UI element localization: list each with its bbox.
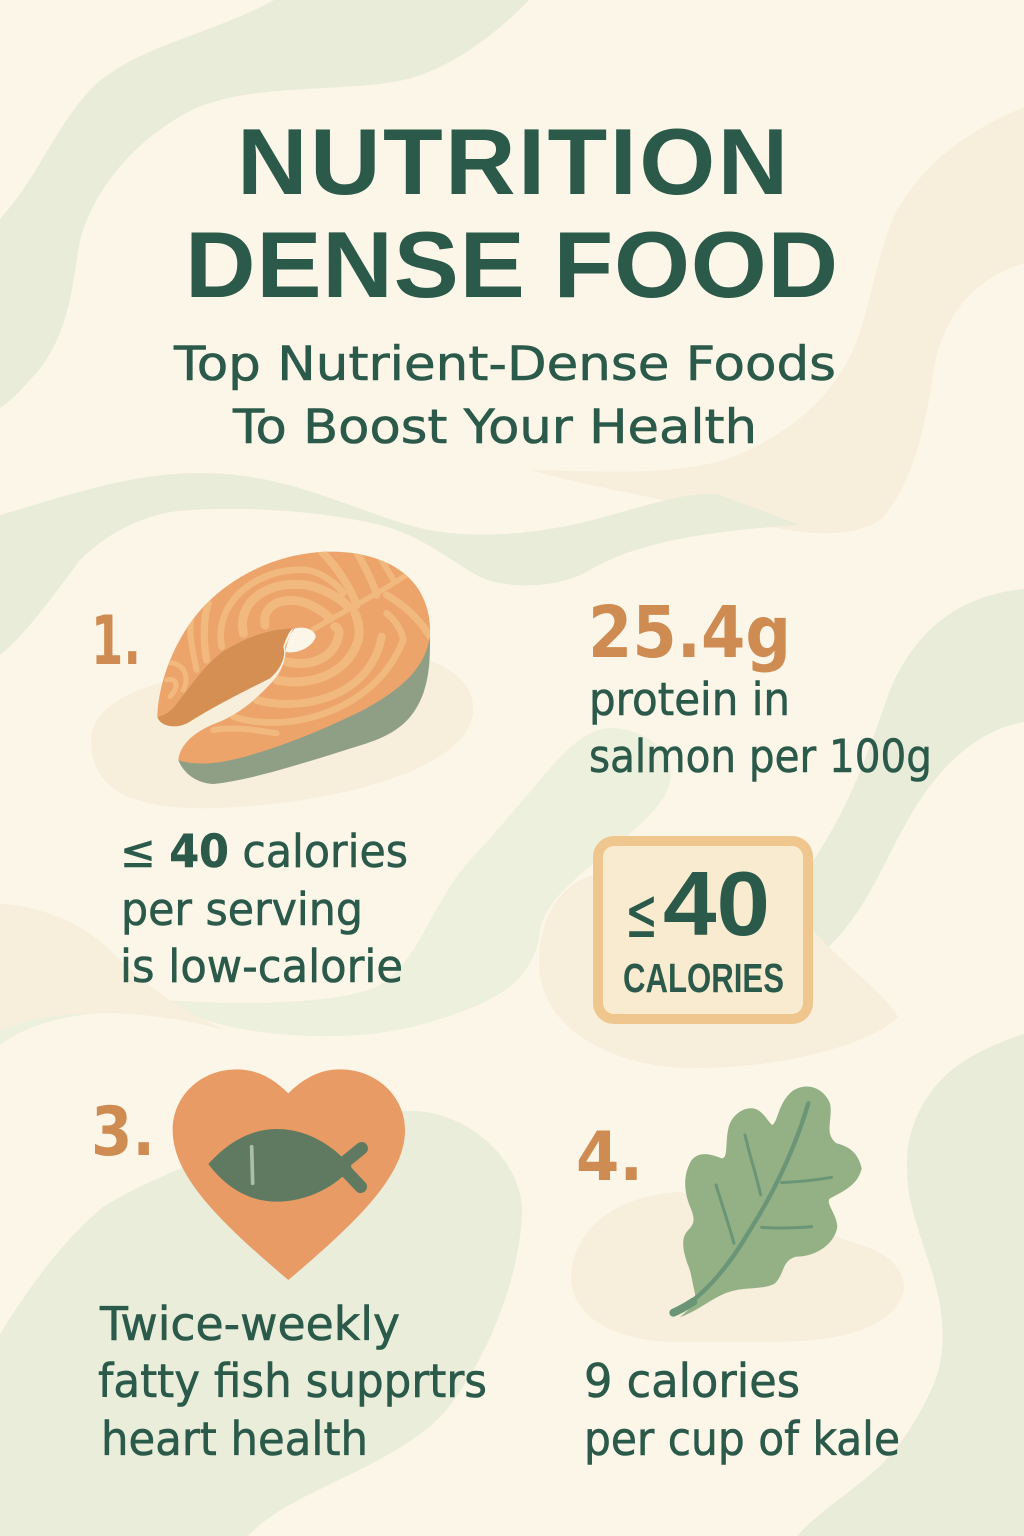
text: twice-weekly fatty fish: heart health [101, 1412, 368, 1466]
subtitle [173, 337, 836, 455]
callout: 40 calories badge [598, 841, 808, 1019]
text: protein in salmon: salmon per 100g [589, 730, 932, 783]
text: kale calories: per cup of kale [584, 1412, 900, 1466]
item 4 number: 4. [576, 1118, 643, 1197]
text: twice-weekly fatty fish: Twice-weekly [99, 1297, 400, 1351]
icon: salmon steak [157, 552, 430, 784]
item 3 number: 3. [91, 1093, 155, 1172]
item 1 number: 1. [91, 602, 141, 681]
stat: 25.4g: 25.4g [588, 591, 791, 674]
callout: 40 calories badge: 40 [663, 854, 770, 955]
text: kale calories [584, 1354, 900, 1466]
callout: 40 calories badge: ≤ [625, 872, 658, 954]
text: protein in salmon: protein in [589, 673, 790, 726]
title: NUTRITION [237, 110, 788, 215]
text: low calorie per serving: ≤ 40 calories [120, 825, 408, 878]
icon: heart with fish [173, 1069, 405, 1280]
text: twice-weekly fatty fish [98, 1297, 487, 1466]
text: kale calories: 9 calories [584, 1354, 800, 1408]
callout: 40 calories badge: CALORIES [623, 955, 784, 1001]
title: DENSE FOOD [185, 213, 838, 318]
text: low calorie per serving: is low-calorie [120, 940, 403, 993]
text: protein in salmon [589, 673, 932, 783]
title [185, 110, 838, 318]
icon: kale leaf [673, 1087, 862, 1317]
text: low calorie per serving: per serving [121, 883, 363, 936]
subtitle: Top Nutrient-Dense Foods [173, 337, 836, 392]
text: twice-weekly fatty fish: fatty fish supprtrs [98, 1354, 487, 1408]
subtitle: To Boost Your Health [232, 400, 757, 455]
text: low calorie per serving [120, 825, 408, 993]
